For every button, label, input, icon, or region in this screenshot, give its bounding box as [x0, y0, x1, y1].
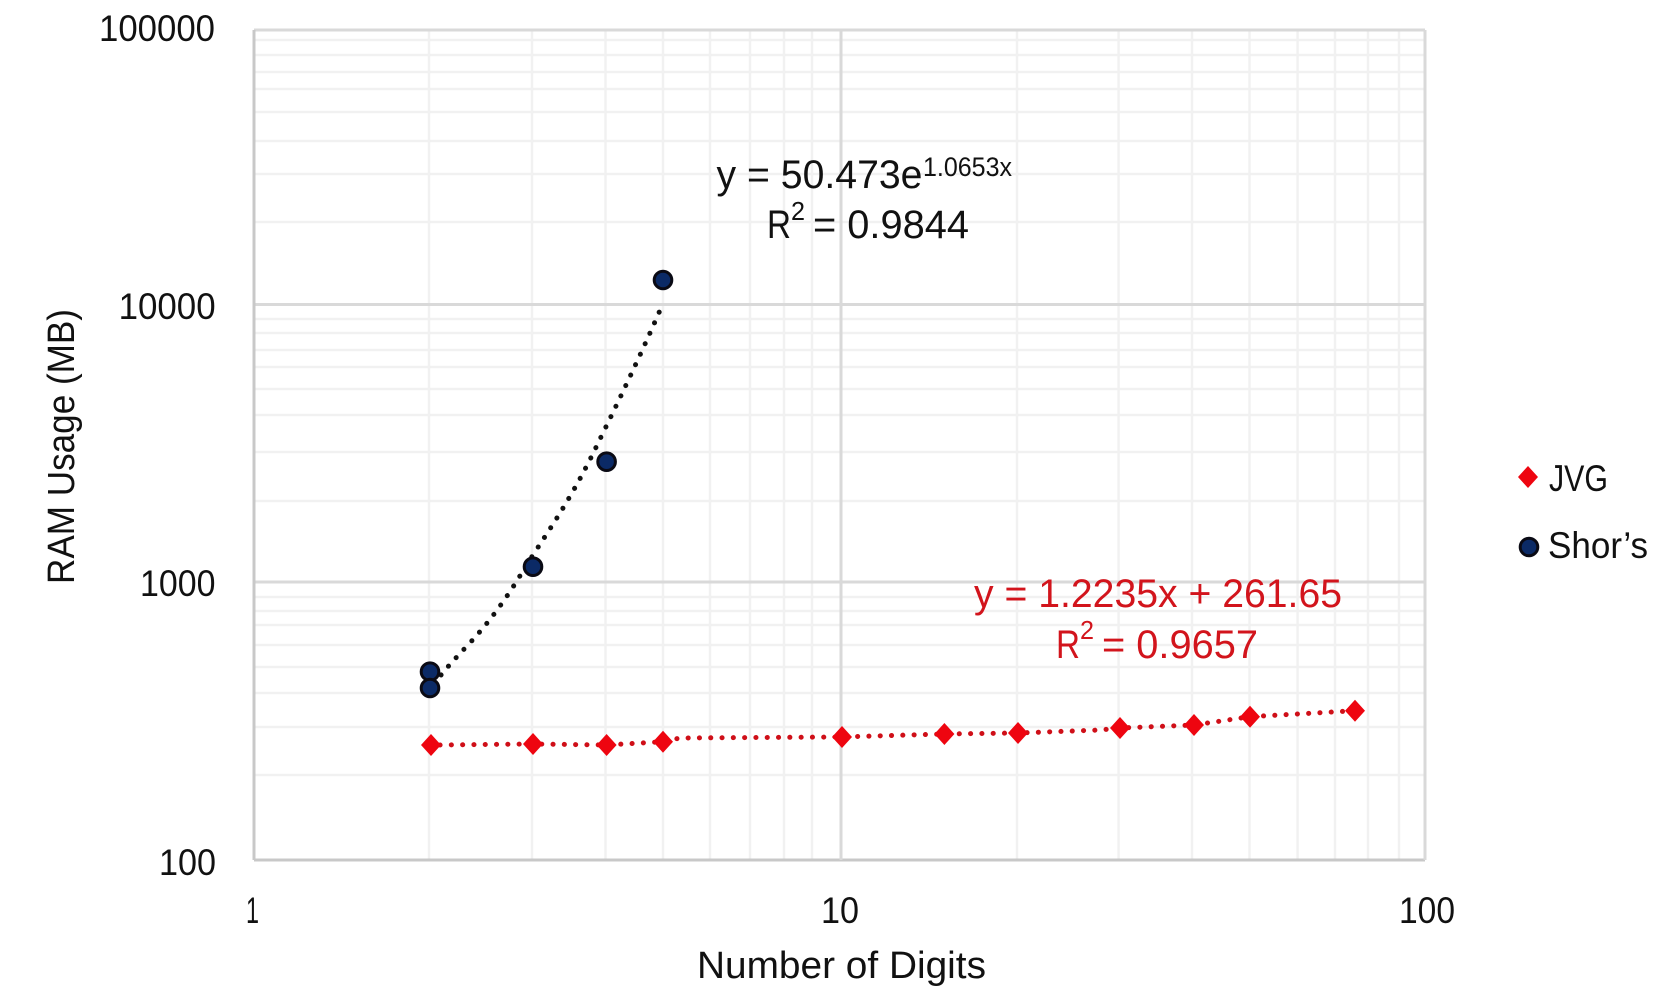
legend entry: JVG: JVG: [1549, 458, 1608, 499]
x axis tick labels: 1: [246, 890, 259, 931]
y axis tick labels: 1000: [140, 563, 216, 604]
Shor's data points: [421, 271, 672, 697]
x axis title: Number of Digits: [697, 945, 986, 987]
x axis tick labels: 100: [1399, 890, 1455, 931]
Shor's trendline equation: R: [767, 203, 791, 247]
Shor's trendline: [441, 308, 661, 675]
x axis tick labels: 10: [821, 890, 859, 931]
y axis tick labels: 10000: [119, 286, 216, 327]
JVG trendline equation: [974, 572, 1342, 667]
y axis tick labels: [99, 8, 216, 883]
y axis tick labels: 100000: [99, 8, 215, 49]
y axis title: RAM Usage (MB): [41, 309, 83, 584]
JVG trendline equation: = 0.9657: [1102, 623, 1258, 667]
y axis tick labels: 100: [159, 842, 216, 883]
JVG trendline equation: R: [1056, 623, 1080, 667]
Shor's trendline equation: 1.0653x: [923, 152, 1012, 182]
legend entry: Shor's: Shor’s: [1548, 525, 1648, 566]
legend: [1518, 458, 1648, 566]
Shor's trendline equation: = 0.9844: [813, 203, 969, 247]
JVG trendline equation: 2: [1080, 615, 1094, 645]
x axis tick labels: [246, 890, 1455, 931]
Shor's trendline equation: y = 50.473e: [716, 153, 922, 197]
JVG trendline: [440, 711, 1355, 745]
Shor's trendline equation: [716, 152, 1012, 247]
JVG trendline equation: y = 1.2235x + 261.65: [974, 572, 1342, 616]
JVG data points: [421, 700, 1365, 756]
Shor's trendline equation: 2: [791, 196, 805, 226]
